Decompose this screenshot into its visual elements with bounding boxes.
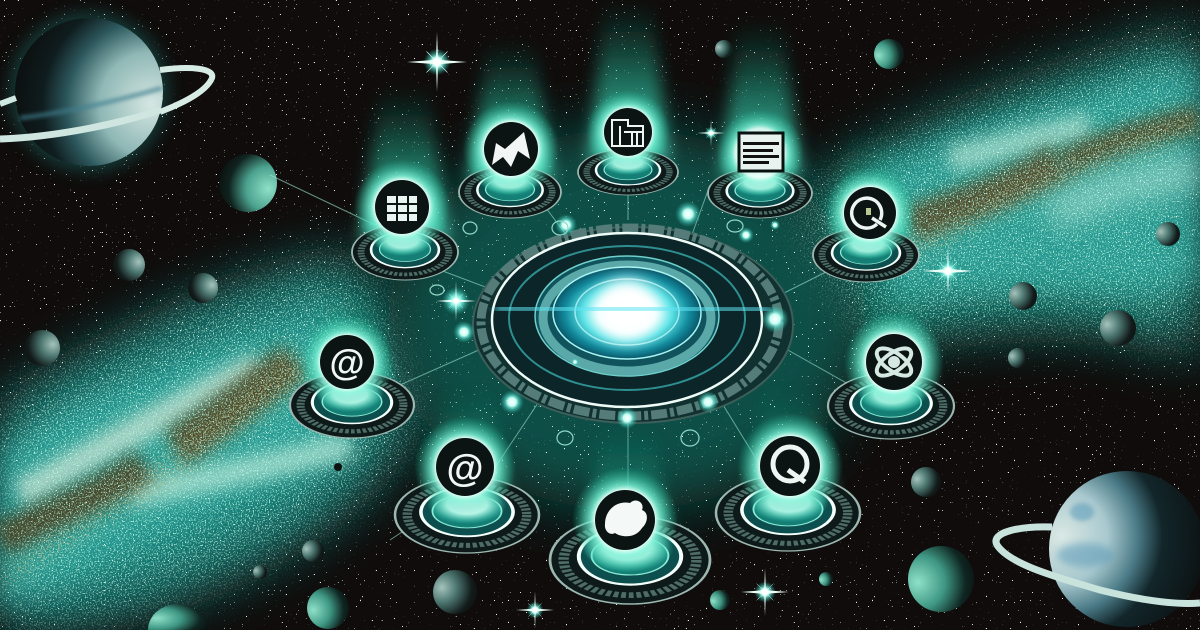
icon: folder document bbox=[612, 120, 643, 146]
icon: text window bbox=[739, 133, 783, 171]
node: spreadsheet app bbox=[352, 85, 458, 280]
node: Q app right bbox=[813, 130, 919, 282]
ringed planet: bottom right bbox=[996, 471, 1200, 627]
icon: table grid bbox=[386, 195, 418, 222]
galaxy band: upper right bbox=[800, 30, 1200, 350]
node: chart app bbox=[459, 40, 561, 218]
galaxy band: lower left bbox=[0, 260, 410, 630]
icon: Q glyph large bbox=[773, 447, 807, 482]
icon: atom bbox=[872, 343, 916, 381]
node: documents app bbox=[578, 0, 678, 195]
node: at sign left bbox=[290, 280, 414, 438]
icon: mountain chart bbox=[492, 132, 530, 167]
node: atom app bbox=[828, 280, 954, 439]
icon: at sign: @ bbox=[329, 342, 365, 383]
icon: cloud creature bbox=[605, 501, 647, 536]
node: at sign lower left bbox=[395, 390, 539, 553]
icon: Q glyph bbox=[852, 198, 886, 228]
sparkle stars bbox=[407, 32, 974, 629]
node: Q app lower right bbox=[716, 390, 860, 551]
teal haze around hub bbox=[387, 130, 867, 510]
central hub bbox=[473, 205, 793, 423]
node: bottom app bbox=[550, 430, 710, 604]
node: browser window app bbox=[708, 20, 812, 218]
connection lines bbox=[270, 175, 850, 540]
icon: at sign: @ bbox=[446, 448, 484, 490]
floating hub nodes bbox=[430, 201, 789, 446]
ringed planet: top left bbox=[0, 12, 212, 172]
